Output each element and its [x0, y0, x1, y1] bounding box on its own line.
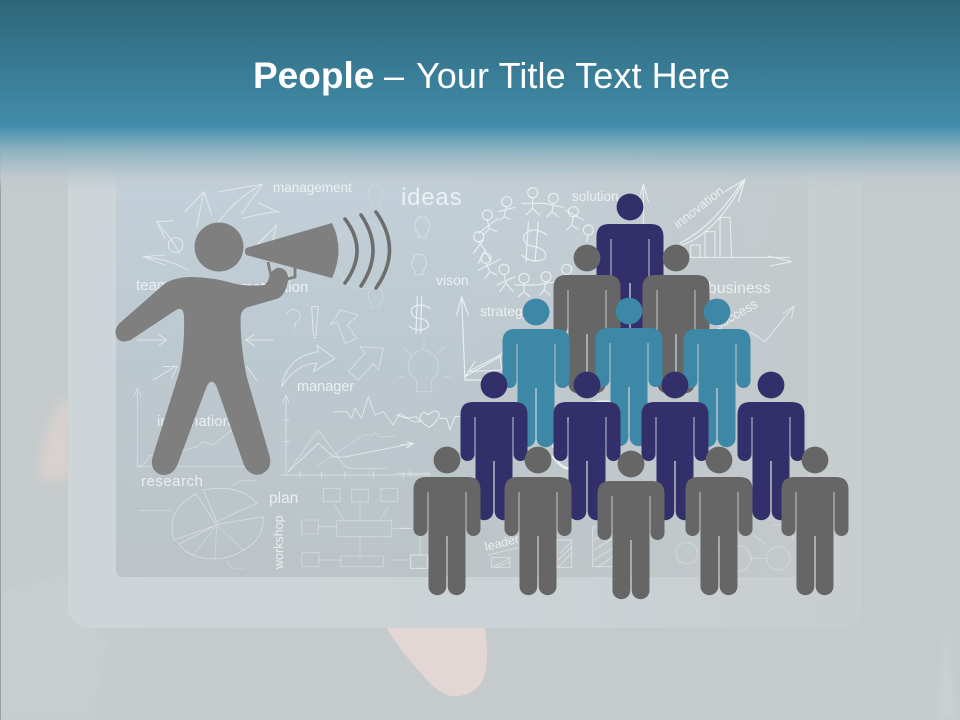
sketch labels	[136, 180, 771, 570]
sketch labels: motivation	[240, 279, 308, 296]
megaphone speaker figure	[115, 212, 389, 475]
leader bars	[488, 527, 613, 567]
title	[253, 55, 730, 96]
sketch labels: management	[273, 180, 352, 195]
sound waves	[345, 212, 390, 288]
ring of people	[473, 188, 593, 297]
sketch labels: vison	[436, 272, 469, 288]
bulbs and ticks	[398, 217, 450, 392]
fingertip	[385, 625, 487, 696]
title: People	[253, 55, 374, 96]
sketch labels: solution	[572, 189, 619, 204]
sketch labels: strategy	[480, 303, 530, 319]
tablet frame	[68, 120, 862, 628]
question and arrows	[287, 310, 300, 334]
pie chart	[172, 488, 263, 559]
sketch labels: information	[157, 414, 231, 430]
chart: information	[133, 388, 267, 467]
row 3: teal people	[502, 298, 750, 447]
megaphone handle	[268, 262, 295, 279]
sketch labels: team	[136, 277, 169, 294]
sketch labels: research	[141, 473, 203, 490]
title: Your Title Text Here	[416, 55, 730, 96]
people pyramid	[414, 194, 848, 599]
row 2: grey people	[554, 245, 710, 393]
head	[194, 222, 244, 272]
title: –	[384, 55, 404, 96]
chart: manager	[280, 395, 430, 478]
row 5: grey people	[414, 447, 848, 599]
row 1: navy person	[596, 194, 664, 342]
sketch labels: business	[708, 280, 771, 297]
body	[115, 268, 288, 475]
growth chart	[638, 184, 648, 237]
tablet screen	[116, 157, 808, 577]
strategy graph	[457, 297, 503, 380]
sketch doodles: right side	[397, 179, 794, 571]
success line	[750, 306, 794, 342]
sketch doodles: left side	[133, 184, 430, 569]
sketch labels: leaders	[483, 530, 527, 554]
heartbeat	[397, 411, 462, 430]
sketch labels: workshop	[272, 515, 286, 570]
header band fade	[0, 127, 960, 193]
header band	[0, 0, 960, 127]
sketch labels: manager	[297, 379, 354, 395]
sketch labels: plan	[269, 490, 298, 507]
sketch labels: innovation	[671, 183, 727, 231]
sketch labels: ideas	[401, 184, 462, 211]
row 4: navy people	[460, 372, 804, 520]
bulbs	[335, 184, 430, 308]
sketch labels: success	[712, 296, 761, 333]
burst arrows	[137, 184, 279, 380]
circle process doodles	[676, 525, 793, 571]
megaphone	[245, 223, 338, 278]
flow chart	[302, 488, 428, 568]
dollar signs	[522, 222, 547, 262]
